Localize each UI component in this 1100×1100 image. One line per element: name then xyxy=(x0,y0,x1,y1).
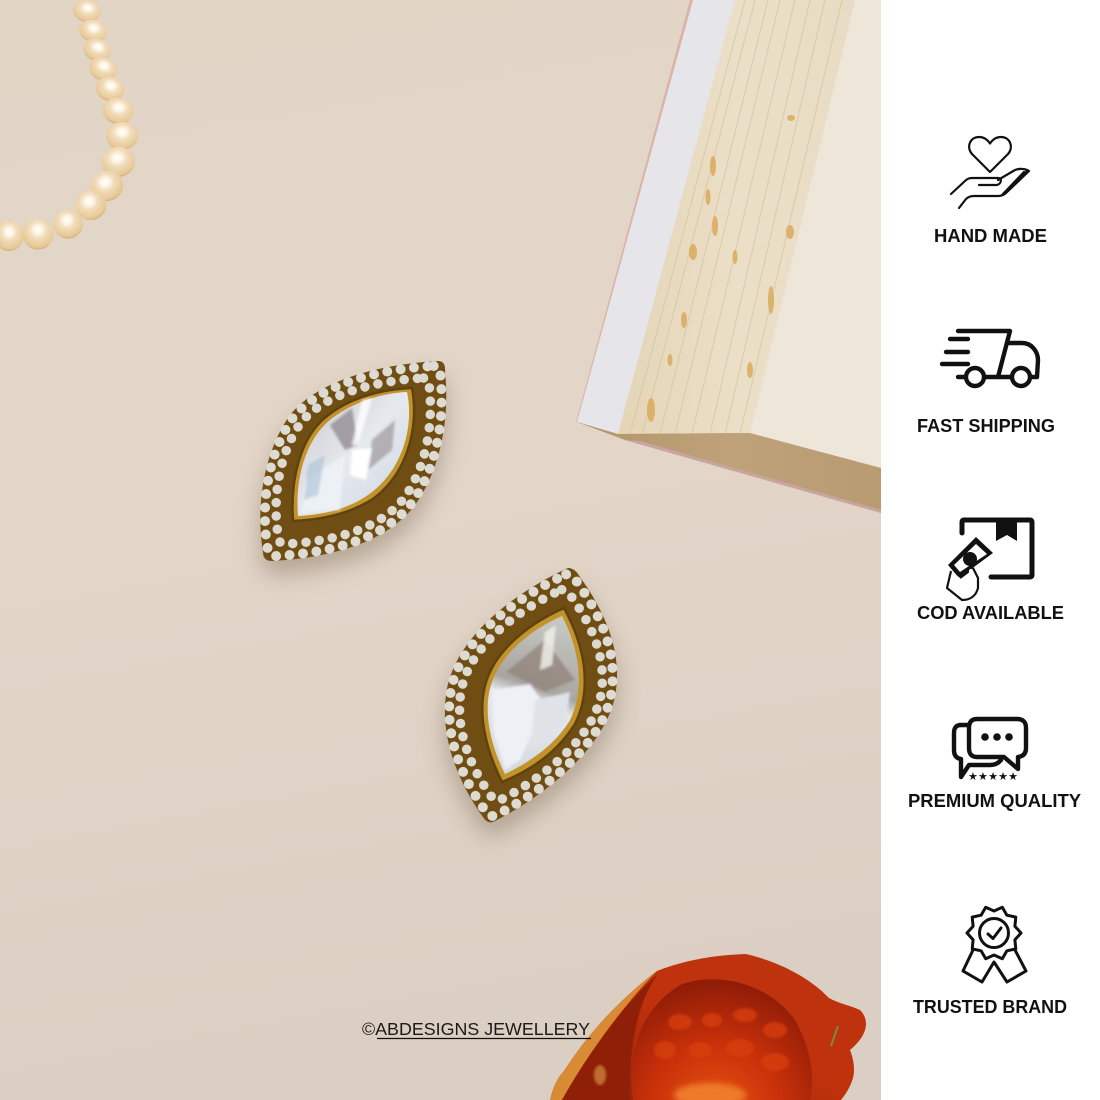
feature: fast shipping xyxy=(917,331,1055,436)
label: trusted brand: TRUSTED BRAND xyxy=(913,997,1067,1017)
outer stone row xyxy=(265,366,442,556)
red dried shell xyxy=(550,954,866,1100)
pearl necklace xyxy=(0,0,138,251)
gold bezel xyxy=(292,388,414,521)
earring: lower right xyxy=(445,568,617,836)
book: white spine xyxy=(577,0,735,434)
feature: hand made xyxy=(934,137,1047,246)
inner stone row xyxy=(276,378,430,544)
kundan stone xyxy=(488,616,579,774)
shell cavity xyxy=(594,979,812,1100)
book: bottom edge xyxy=(577,422,881,513)
panel: features sidebar xyxy=(881,0,1100,1100)
earring body xyxy=(260,361,446,561)
feature: premium quality xyxy=(908,719,1081,811)
inner stone row xyxy=(460,590,602,801)
icon: heart in hand xyxy=(951,137,1029,208)
earring body xyxy=(445,568,617,822)
icon: chat bubbles with stars: ★★★★★ xyxy=(968,770,1018,783)
icon: delivery truck xyxy=(942,331,1038,386)
watermark: ©ABDESIGNS JEWELLERY xyxy=(362,1019,590,1039)
label: cod available: COD AVAILABLE xyxy=(917,603,1064,623)
label: premium quality: PREMIUM QUALITY xyxy=(908,791,1081,811)
book: page block xyxy=(618,0,855,438)
icon: box and cash in hand xyxy=(947,520,1032,600)
book: pink cover edge xyxy=(576,0,694,424)
earring: upper left xyxy=(260,361,446,575)
kundan stone xyxy=(297,392,409,516)
icon: award rosette xyxy=(963,907,1026,982)
feature: cash on delivery xyxy=(917,520,1064,623)
feature: trusted brand xyxy=(913,907,1067,1017)
book: open page xyxy=(750,0,881,468)
label: fast shipping: FAST SHIPPING xyxy=(917,416,1055,436)
book xyxy=(576,0,881,513)
icon: chat bubbles with stars xyxy=(954,719,1026,783)
gold bezel xyxy=(482,608,585,782)
label: hand made: HAND MADE xyxy=(934,226,1047,246)
outer stone row xyxy=(449,574,613,816)
